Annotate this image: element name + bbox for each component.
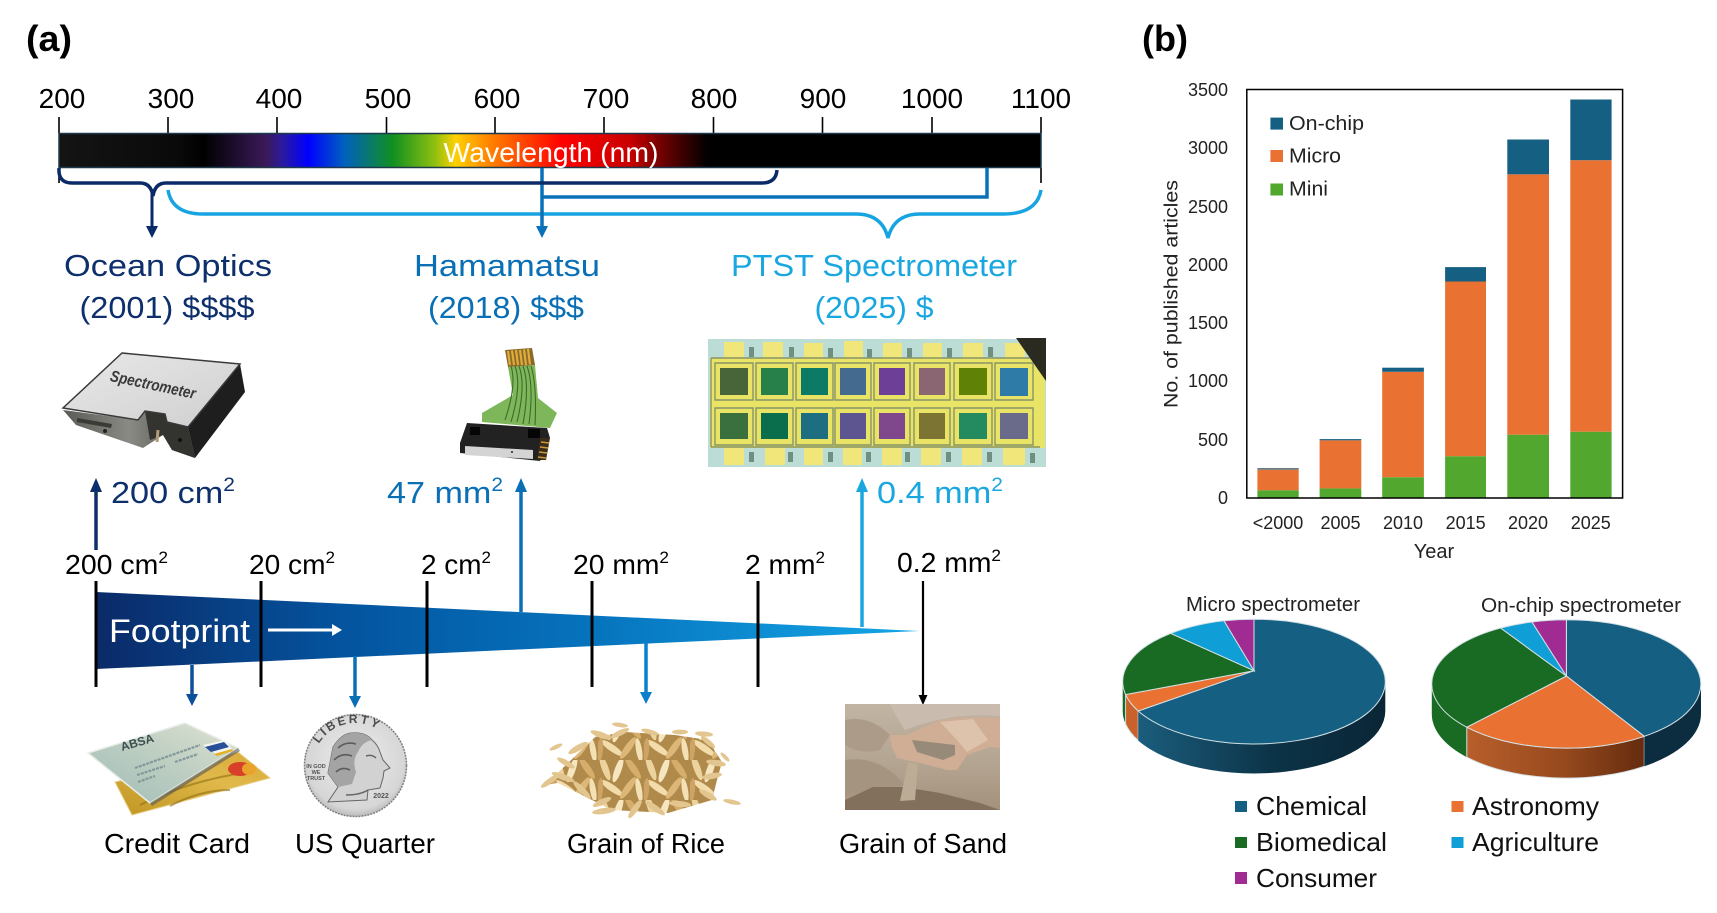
footprint scale labels: 2 [815, 548, 825, 567]
wavelength axis labels: 600 [474, 83, 520, 114]
bar chart legend: Mini [1289, 178, 1328, 200]
pie chart title: On-chip spectrometer: On-chip spectrometer [1481, 595, 1681, 617]
wavelength axis labels: 800 [691, 83, 737, 114]
pie chart legend: Chemical [1256, 791, 1367, 821]
pie chart legend: Agriculture [1472, 827, 1599, 857]
y axis tick labels: 3500 [1188, 80, 1228, 100]
y axis tick labels: 2500 [1188, 197, 1228, 217]
product title: Ocean Optics: Ocean Optics [64, 248, 272, 283]
footprint scale labels: 200 cm [65, 549, 157, 580]
footprint scale labels: 20 cm [249, 549, 325, 580]
bar chart legend: On-chip [1289, 113, 1364, 135]
product title: Hamamatsu: Hamamatsu [414, 248, 600, 283]
3D pie chart: On-chip spectrometer [1432, 620, 1701, 778]
footprint scale labels: 0.2 mm [897, 547, 990, 578]
footprint size callout: 0.4 mm2: 0.4 mm [877, 475, 980, 510]
image: benchtop spectrometer box [63, 353, 245, 458]
bracket and arrow: PTST range [168, 190, 1041, 238]
footprint size callout: 47 mm2 [387, 475, 527, 612]
footprint scale labels: 2 cm [421, 549, 482, 580]
y axis tick labels: 1000 [1188, 371, 1228, 391]
product title: PTST Spectrometer: (2025) $ [814, 290, 934, 325]
item labels: US Quarter [295, 828, 435, 859]
footprint size callout: 0.4 mm2 [856, 475, 1003, 627]
bars: Micro [1257, 160, 1612, 490]
footprint size callout: 0.4 mm2: 2 [991, 475, 1003, 496]
image: PTST spectrometer chip [708, 338, 1046, 467]
footprint wedge: Footprint [109, 613, 250, 649]
footprint size callout: 200 cm2 [90, 475, 235, 550]
footprint scale labels: 20 mm [573, 549, 659, 580]
wavelength spectrum bar: Wavelength (nm) [444, 137, 658, 168]
footprint scale labels: 2 [482, 548, 491, 567]
product title: Ocean Optics [64, 248, 272, 325]
3D pie chart: Micro spectrometer [1123, 619, 1385, 773]
x axis tick labels: 2015 [1446, 513, 1486, 533]
image: benchtop spectrometer box: Spectrometer [109, 368, 198, 403]
wavelength axis labels: 200 [39, 83, 85, 114]
footprint size callout: 47 mm2: 2 [491, 475, 503, 496]
image: US quarter coin: LIBERTY [312, 714, 380, 744]
image: hand with sand [845, 704, 1000, 810]
product title: Hamamatsu: (2018) $$$ [428, 290, 584, 325]
bars: Mini [1257, 432, 1612, 498]
image: US quarter coin: WE [312, 770, 321, 776]
y axis tick labels: 3000 [1188, 138, 1228, 158]
wavelength axis labels [39, 83, 1071, 114]
y axis tick labels: 2000 [1188, 255, 1228, 275]
bar chart legend [1270, 113, 1364, 200]
wavelength spectrum bar [59, 117, 1041, 183]
panel label (b): (b) [1142, 18, 1188, 59]
item labels: Grain of Sand [839, 828, 1007, 859]
image: US quarter coin: IN GOD [306, 764, 326, 770]
footprint scale labels [65, 546, 1001, 580]
footprint size callout: 200 cm2: 200 cm [111, 475, 213, 510]
product title: Hamamatsu [414, 248, 600, 325]
arrow: to grain of rice [640, 643, 652, 704]
x axis tick labels: <2000 [1253, 513, 1303, 533]
y axis tick labels: 1500 [1188, 313, 1228, 333]
product title: Ocean Optics: (2001) $$$$ [80, 290, 254, 325]
pie chart legend [1235, 791, 1599, 893]
pie chart legend: Astronomy [1472, 791, 1599, 821]
image: US quarter coin: TRUST [307, 776, 326, 782]
image: credit cards: ABSA [119, 731, 156, 754]
image: credit cards [88, 723, 270, 815]
product title: PTST Spectrometer: PTST Spectrometer [731, 248, 1017, 283]
product title: PTST Spectrometer [731, 248, 1017, 325]
y axis tick labels [1188, 80, 1228, 508]
image: US quarter coin: 2022 [373, 793, 389, 800]
wavelength axis labels: 300 [148, 83, 194, 114]
wavelength axis labels: 900 [800, 83, 846, 114]
x axis tick labels: 2010 [1383, 513, 1423, 533]
stacked bar chart: published articles per year [1247, 90, 1623, 498]
footprint scale labels: 2 [158, 548, 168, 567]
wavelength axis labels: 400 [256, 83, 302, 114]
item labels: Grain of Rice [567, 828, 725, 859]
footprint scale labels: 2 [991, 546, 1001, 565]
panel label (a): (a) [26, 18, 72, 59]
image: pile of rice grains [539, 722, 741, 820]
pie chart legend: Consumer [1256, 863, 1377, 893]
bars: On-chip [1257, 100, 1612, 470]
x axis tick labels: 2005 [1320, 513, 1361, 533]
footprint scale labels: 2 mm [745, 549, 815, 580]
x axis tick labels [1253, 513, 1611, 533]
wavelength axis labels: 1000 [901, 83, 963, 114]
wavelength axis labels: 700 [583, 83, 629, 114]
y axis tick labels: 500 [1198, 430, 1228, 450]
footprint wedge [96, 581, 919, 687]
pie chart title: Micro spectrometer: Micro spectrometer [1186, 594, 1360, 616]
footprint size callout: 200 cm2: 2 [223, 475, 235, 496]
pie chart legend: Biomedical [1256, 827, 1387, 857]
x axis tick labels: 2025 [1571, 513, 1611, 533]
footprint size callout: 47 mm2: 47 mm [387, 475, 482, 510]
wavelength axis labels: 500 [365, 83, 411, 114]
arrow: to credit card [186, 665, 198, 706]
y axis tick labels: 0 [1218, 488, 1228, 508]
wavelength axis labels: 1100 [1011, 83, 1071, 114]
bracket and arrow: Hamamatsu range [536, 168, 987, 238]
arrow: to US quarter [349, 656, 361, 708]
footprint scale labels: 2 [326, 548, 335, 567]
arrow: to grain of sand [918, 581, 928, 705]
bracket and arrow: Ocean Optics range [59, 168, 777, 238]
image: US quarter coin [304, 714, 408, 818]
item labels [104, 828, 1007, 859]
image: Hamamatsu sensor module [460, 348, 557, 461]
bar chart legend: Micro [1289, 146, 1341, 168]
x axis tick labels: 2020 [1508, 513, 1548, 533]
y axis title: No. of published articles [1162, 180, 1182, 408]
footprint scale labels: 2 [659, 548, 669, 567]
x axis title: Year [1414, 541, 1455, 563]
item labels: Credit Card [104, 828, 250, 859]
